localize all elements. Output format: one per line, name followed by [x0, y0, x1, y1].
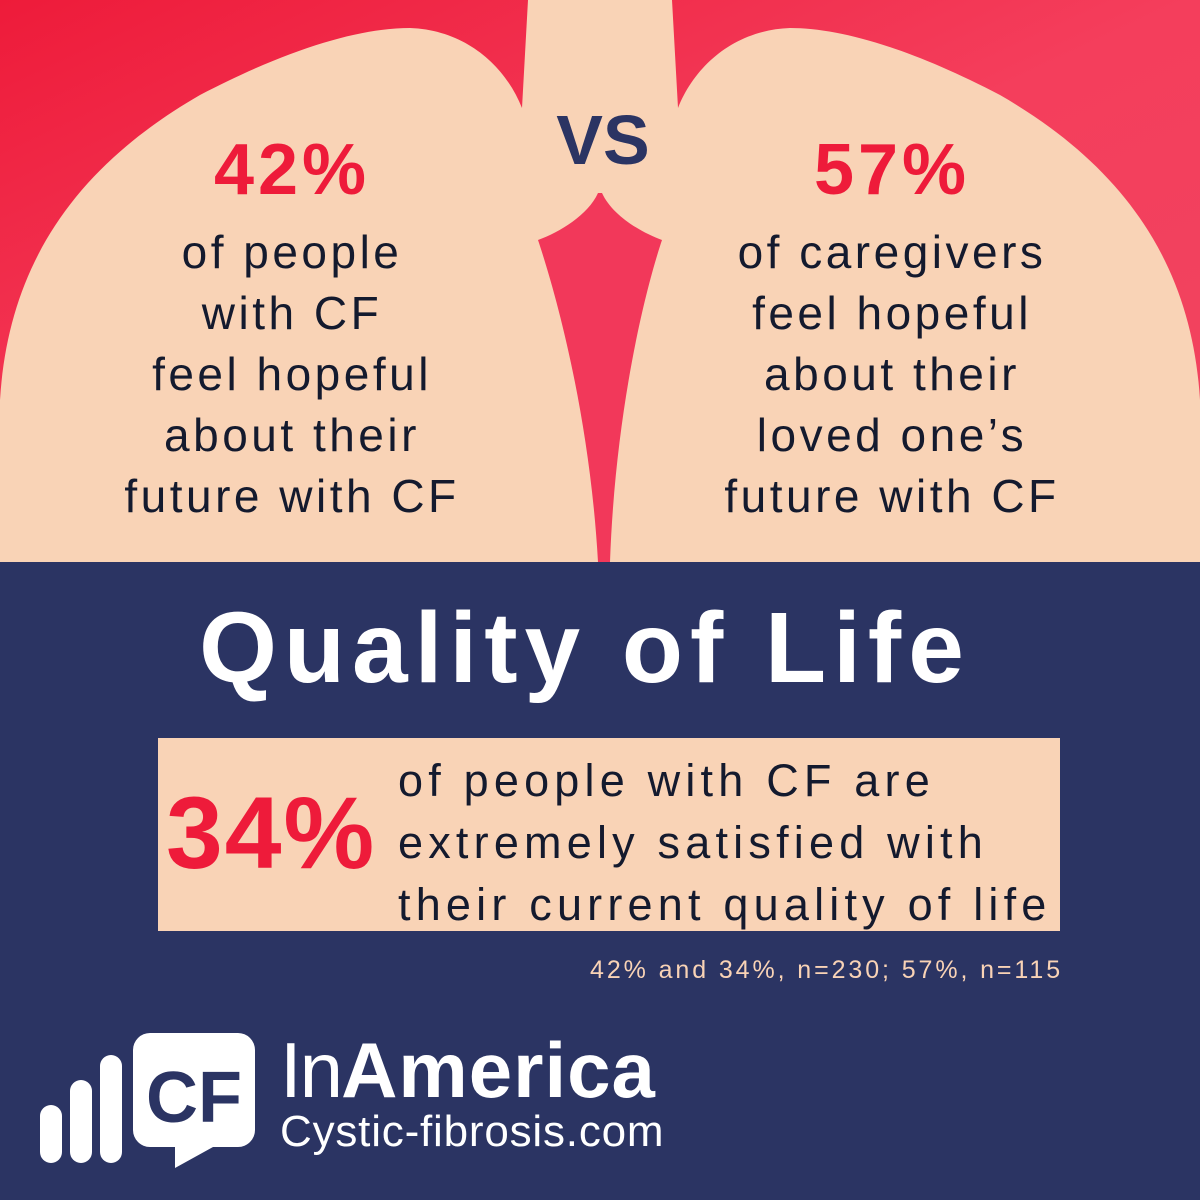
left description: feel hopeful: [152, 348, 432, 400]
lungs shape: [0, 0, 1200, 562]
left description: [124, 226, 460, 522]
left description: about their: [164, 409, 420, 461]
right description: future with CF: [724, 470, 1060, 522]
callout text: [398, 755, 1052, 930]
left description: future with CF: [124, 470, 460, 522]
right description: loved one’s: [757, 409, 1027, 461]
right description: [724, 226, 1060, 522]
left stat: [124, 130, 460, 522]
icon: signal bars: [40, 1033, 255, 1168]
VS label: VS: [556, 101, 650, 179]
34%: 34%: [166, 776, 376, 890]
logo: [40, 1026, 664, 1168]
wordmark: [280, 1026, 664, 1156]
top panel: lungs background: [0, 0, 1200, 562]
callout text: of people with CF are: [398, 755, 935, 806]
callout text: extremely satisfied with: [398, 817, 988, 868]
wordmark: Cystic-fibrosis.com: [280, 1107, 664, 1156]
right description: about their: [764, 348, 1020, 400]
left description: with CF: [202, 287, 382, 339]
57%: 57%: [814, 130, 970, 210]
callout text: their current quality of life: [398, 879, 1052, 930]
central pink wedge: [538, 193, 662, 562]
right description: feel hopeful: [752, 287, 1032, 339]
right stat: [724, 130, 1060, 522]
left description: of people: [182, 226, 402, 278]
right description: of caregivers: [738, 226, 1046, 278]
callout box: 34%: [158, 738, 1060, 931]
footnote: 42% and 34%, n=230; 57%, n=115: [590, 956, 1063, 984]
42%: 42%: [214, 130, 370, 210]
icon: signal bars: CF: [146, 1058, 242, 1138]
wordmark: InAmerica: [280, 1026, 656, 1114]
heading: Quality of Life: Quality of Life: [199, 592, 971, 704]
